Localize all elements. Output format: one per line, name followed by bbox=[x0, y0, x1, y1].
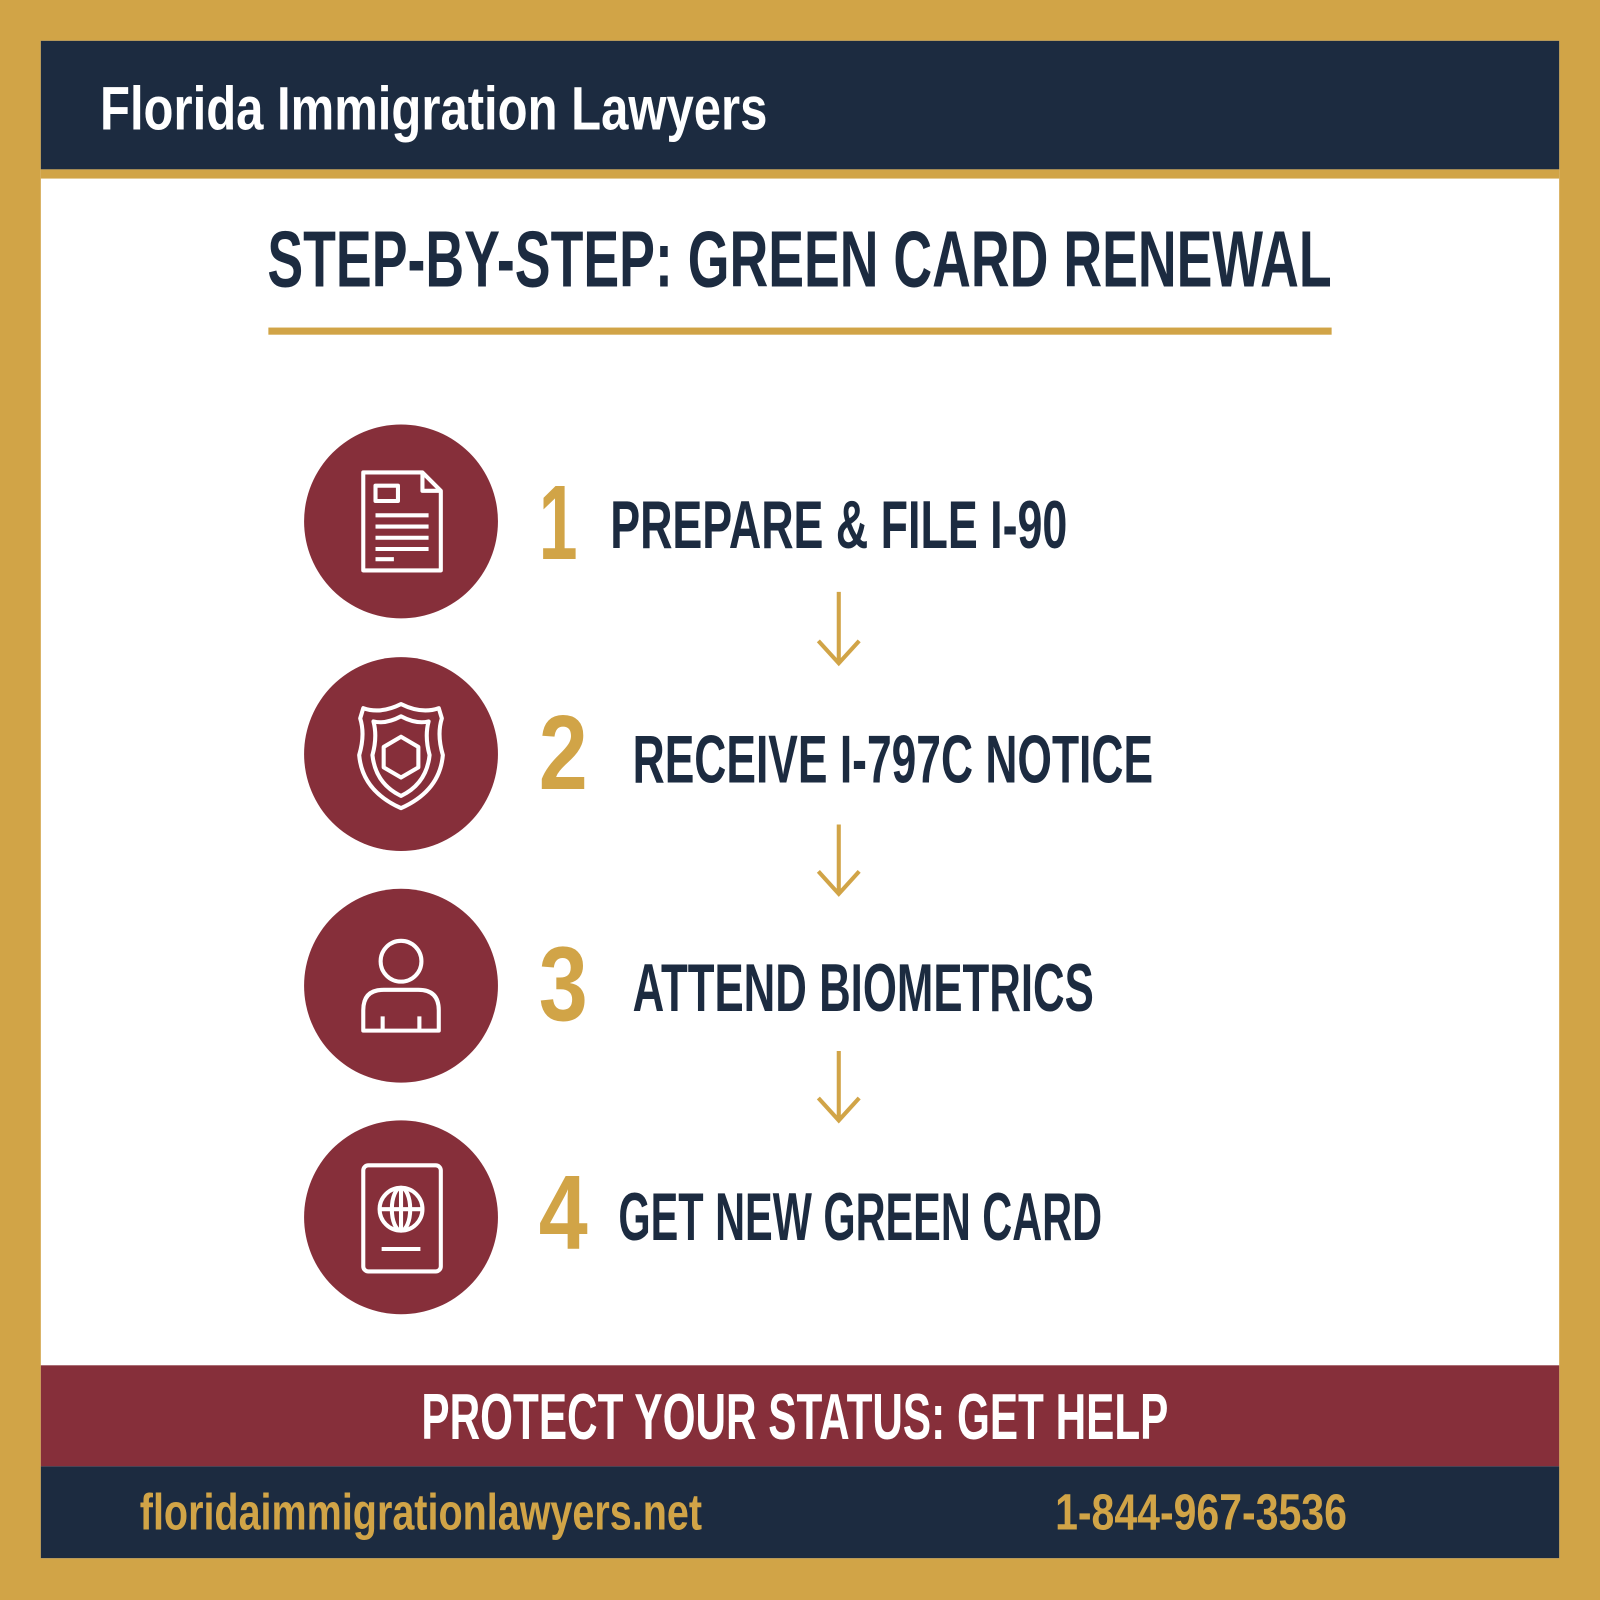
step 4: 4 bbox=[539, 1154, 588, 1272]
title bbox=[267, 215, 1332, 335]
step 2: RECEIVE I-797C NOTICE bbox=[633, 723, 1153, 798]
footer: website: floridaimmigrationlawyers.net bbox=[140, 1484, 702, 1541]
step 3: ATTEND BIOMETRICS bbox=[633, 951, 1094, 1026]
step 4: GET NEW GREEN CARD bbox=[618, 1180, 1102, 1255]
step 2: 2 bbox=[539, 694, 588, 812]
arrow 3 bbox=[818, 1051, 859, 1120]
icon: passport bbox=[304, 1120, 498, 1314]
step 2 bbox=[304, 657, 1153, 851]
icon: person bbox=[304, 889, 498, 1083]
footer bbox=[41, 1466, 1559, 1558]
step 1 bbox=[304, 424, 1067, 618]
step 4 bbox=[304, 1120, 1102, 1314]
footer: phone: 1-844-967-3536 bbox=[1055, 1484, 1347, 1541]
icon: document bbox=[304, 424, 498, 618]
arrow 1 bbox=[818, 592, 859, 663]
icon: shield bbox=[304, 657, 498, 851]
arrow 2 bbox=[818, 824, 859, 894]
step 1: 1 bbox=[539, 464, 578, 582]
step 3: 3 bbox=[539, 925, 588, 1043]
step 1: PREPARE & FILE I-90 bbox=[610, 488, 1067, 563]
header: firm name: Florida Immigration Lawyers bbox=[100, 75, 767, 143]
header bar bbox=[41, 41, 1559, 179]
step 3 bbox=[304, 889, 1094, 1083]
cta banner: PROTECT YOUR STATUS: GET HELP bbox=[421, 1380, 1168, 1453]
cta banner bbox=[41, 1365, 1559, 1466]
